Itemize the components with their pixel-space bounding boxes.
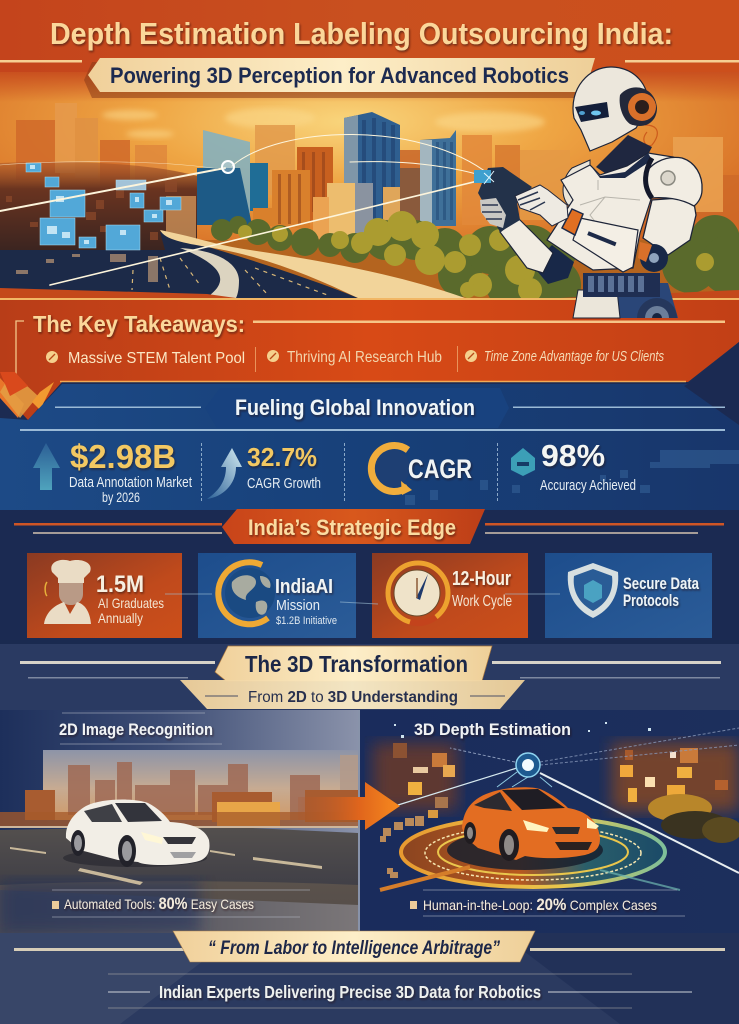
headphone — [620, 87, 657, 126]
takeaways corner diamonds — [0, 372, 54, 418]
heading ribbon: Fueling Global Innovation — [235, 395, 475, 420]
orange glow — [373, 743, 739, 811]
dark band behind strategic edge — [0, 510, 739, 650]
orange car — [462, 787, 600, 861]
beam node — [222, 161, 234, 173]
card: IndiaAI mission: Mission — [276, 597, 320, 614]
subheading: from 2D to 3D: From 2D to 3D Understanding — [248, 689, 458, 706]
handheld device — [474, 167, 532, 232]
card: IndiaAI mission: IndiaAI — [275, 576, 333, 598]
heading: India's Strategic Edge: India’s Strategic Edge — [248, 515, 456, 540]
subheading: from 2D to 3D — [180, 680, 525, 709]
neck — [596, 135, 652, 178]
heading: The 3D Transformation — [20, 646, 721, 681]
3D panel heading: 3D Depth Estimation — [414, 721, 571, 739]
stat: growth: CAGR Growth — [247, 475, 321, 492]
stat: CAGR badge — [371, 446, 472, 495]
data tiles — [26, 163, 181, 250]
header band — [0, 0, 739, 110]
subtitle lines — [0, 60, 739, 62]
stepped pixels left of ring — [380, 816, 424, 878]
road surface — [0, 826, 358, 905]
card: AI graduates — [27, 553, 182, 638]
heading: India's Strategic Edge — [14, 509, 724, 544]
orange buildings — [297, 147, 333, 222]
card: AI graduates: Annually — [98, 610, 143, 626]
card: work cycle — [372, 553, 528, 638]
stat: growth: 32.7% — [247, 442, 317, 472]
right upper arm — [643, 197, 696, 255]
wheel base — [573, 283, 678, 318]
dark city block left — [0, 162, 197, 252]
road — [0, 230, 465, 298]
radar rings — [380, 817, 680, 890]
blue tower — [344, 112, 400, 232]
panel: 2D image recognition — [0, 710, 358, 933]
subtitle plaque: Powering 3D Perception for Advanced Robotics — [110, 63, 569, 88]
scan node — [516, 753, 540, 777]
robot — [474, 67, 702, 318]
stat: accuracy — [511, 438, 636, 494]
lit building — [217, 802, 280, 826]
stat: market size: by 2026 — [102, 489, 140, 505]
trees — [211, 211, 739, 311]
hero illustration: city and road — [0, 72, 739, 311]
ground under trees — [200, 240, 739, 298]
heading ribbon — [205, 388, 509, 428]
right elbow — [638, 242, 668, 272]
head — [573, 67, 648, 151]
icon: globe — [218, 562, 275, 624]
title: Depth Estimation Labeling Outsourcing India: — [50, 16, 673, 51]
sky — [0, 72, 739, 298]
scan beams — [0, 134, 490, 285]
glass frame building — [203, 130, 250, 213]
city silhouette — [68, 755, 358, 820]
background buildings — [16, 103, 739, 235]
left elbow — [532, 245, 574, 284]
panel: key takeaways — [0, 300, 739, 420]
takeaway: talent pool: Massive STEM Talent Pool — [68, 350, 245, 367]
footer background — [0, 933, 739, 1024]
card: IndiaAI mission: $1.2B Initiative — [276, 615, 337, 627]
card: secure data: Protocols — [623, 592, 679, 610]
2D panel heading: 2D Image Recognition — [59, 721, 213, 739]
card: work cycle: 12-Hour — [452, 568, 511, 590]
stat: growth — [207, 442, 321, 499]
takeaway: time zone: Time Zone Advantage for US Clients — [484, 349, 664, 365]
data pixels — [393, 743, 728, 818]
takeaway: research hub: Thriving AI Research Hub — [287, 349, 442, 366]
quote banner — [14, 931, 725, 962]
icon: graduate — [44, 560, 91, 624]
left forearm — [500, 218, 553, 273]
panel: fueling global innovation — [0, 342, 739, 515]
automated tools caption: Automated Tools: 80% Easy Cases — [64, 894, 254, 913]
heading: The 3D Transformation: The 3D Transformation — [245, 651, 468, 677]
right forearm — [573, 218, 638, 272]
right-side trees — [648, 794, 739, 843]
white car — [63, 800, 209, 867]
right hand — [515, 185, 568, 226]
footer tagline — [108, 974, 692, 1008]
card: secure data: Secure Data — [623, 575, 700, 593]
icon: shield — [568, 563, 618, 618]
stat: market size — [33, 438, 192, 505]
stat: market size: Data Annotation Market — [69, 475, 192, 491]
band under hero — [0, 288, 739, 298]
faint data pixels — [405, 450, 739, 505]
stat: accuracy: 98% — [541, 438, 605, 473]
scan lines — [398, 728, 739, 873]
waist — [583, 273, 660, 297]
icon: clock — [388, 563, 448, 623]
card: work cycle: Work Cycle — [452, 593, 512, 610]
panel: 3D transformation background — [0, 640, 739, 715]
visor — [575, 102, 609, 122]
clouds — [102, 108, 545, 138]
orange cuff — [562, 209, 583, 235]
stat: market size: $2.98B — [70, 438, 176, 475]
second tower — [420, 130, 456, 226]
footer tagline: Indian Experts Delivering Precise 3D Data for Robotics — [159, 982, 541, 1002]
stat: CAGR badge: CAGR — [408, 454, 472, 484]
left hand — [480, 198, 506, 228]
stat: accuracy: Accuracy Achieved — [540, 478, 636, 494]
torso — [547, 153, 673, 270]
card: secure data — [545, 553, 712, 638]
panel: 3D depth estimation — [358, 710, 739, 933]
quote banner: “ From Labor to Intelligence Arbitrage” — [208, 938, 500, 959]
wires — [644, 125, 657, 146]
arrow: 2D to 3D — [298, 782, 400, 830]
human-in-the-loop caption: Human-in-the-Loop: 20% Complex Cases — [423, 895, 657, 914]
subtitle plaque — [84, 58, 595, 98]
card: IndiaAI mission — [198, 553, 356, 638]
section divider lines — [20, 406, 725, 431]
card: AI graduates: 1.5M — [96, 571, 144, 598]
right shoulder — [645, 157, 702, 206]
takeaways heading: The Key Takeaways: — [33, 311, 245, 337]
beige buildings — [327, 183, 355, 239]
left shoulder — [563, 160, 590, 205]
takeaways corner bracket — [16, 321, 24, 375]
card: AI graduates: AI Graduates — [98, 595, 164, 611]
